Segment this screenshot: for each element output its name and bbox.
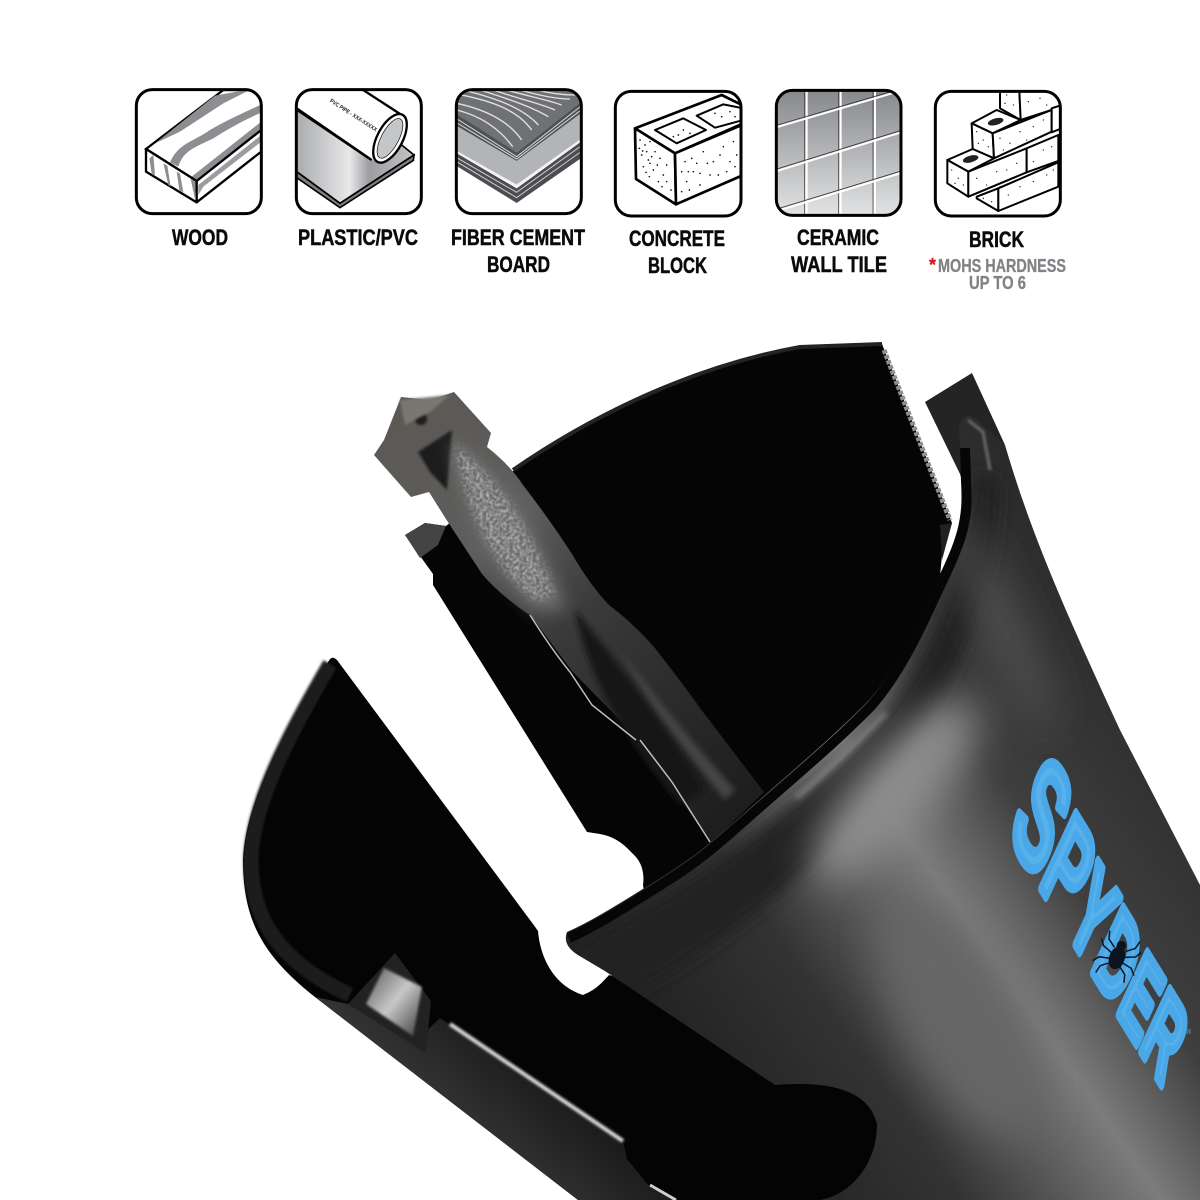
saw cup: left shell and interior [243, 658, 900, 1200]
icon: brick wall [935, 90, 1062, 216]
rivet tab [348, 953, 431, 1053]
label: wood: WOOD [172, 225, 228, 250]
label: ceramic wall tile: CERAMIC [797, 225, 879, 250]
icon: plastic pvc pipe [295, 89, 421, 214]
brand logo: SPYDER [995, 722, 1200, 1114]
label: concrete block: BLOCK [648, 253, 707, 278]
lower shell band [315, 997, 676, 1200]
note: mohs hardness: * [929, 255, 936, 275]
lip rim [569, 448, 967, 938]
label: fiber cement board: BOARD [487, 252, 550, 277]
saw cup: front body [560, 373, 1200, 1200]
label: brick: BRICK [969, 227, 1024, 252]
icon: spider [1089, 929, 1146, 985]
label: plastic pvc: PLASTIC/PVC [298, 225, 418, 250]
note: mohs hardness [929, 255, 1066, 293]
icon: plastic pvc pipe: PVC PIPE - XXX-XXXXX [328, 98, 378, 133]
note: mohs hardness: UP TO 6 [969, 273, 1026, 293]
labels [172, 225, 1066, 293]
icon: ceramic wall tile [775, 88, 903, 218]
top right tab [925, 373, 1005, 490]
registered mark: ® [1186, 1028, 1192, 1036]
label: ceramic wall tile [791, 225, 887, 277]
label: concrete block: CONCRETE [629, 226, 725, 251]
note: mohs hardness: MOHS HARDNESS [938, 256, 1066, 276]
label: concrete block [629, 226, 725, 278]
saw cup: back wall interior [405, 344, 952, 915]
material icons row [136, 88, 1062, 218]
product: hole saw with drill bit [243, 344, 1200, 1200]
drill bit [374, 392, 764, 843]
icon: concrete block [615, 91, 743, 216]
label: ceramic wall tile: WALL TILE [791, 252, 887, 277]
rivet highlight [366, 968, 422, 1036]
bright edge on ledge [450, 1024, 623, 1141]
icon: wood [136, 89, 263, 214]
surface shading [560, 470, 1073, 1160]
icon: fiber cement board [455, 88, 583, 214]
label: fiber cement board: FIBER CEMENT [451, 225, 585, 250]
label: fiber cement board [451, 225, 585, 277]
